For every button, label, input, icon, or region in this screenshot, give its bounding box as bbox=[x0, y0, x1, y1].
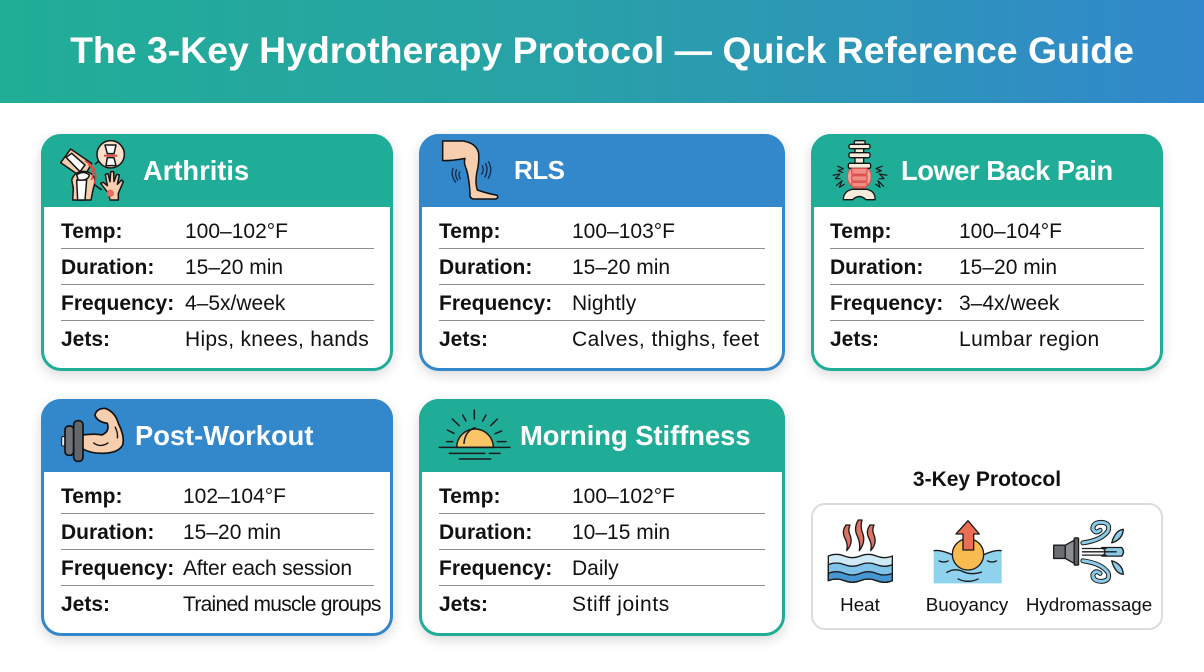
heading: Arthritis bbox=[143, 155, 249, 186]
field: Frequency bbox=[439, 557, 619, 580]
field: Temp bbox=[830, 220, 1062, 243]
panel: 3-Key Protocol bbox=[811, 503, 1163, 630]
field: Duration bbox=[61, 521, 281, 544]
field: Jets: Stiff joints bbox=[572, 593, 670, 616]
field: Jets: Jets: bbox=[830, 328, 879, 351]
heading: 3-Key Protocol: 3-Key Protocol bbox=[913, 468, 1061, 491]
field: Duration bbox=[439, 521, 670, 544]
field: Frequency: Frequency: bbox=[61, 557, 174, 580]
panel: Lower Back Pain bbox=[811, 134, 1163, 371]
field: Temp: Temp: bbox=[61, 485, 122, 508]
field: Frequency: Frequency: bbox=[830, 292, 943, 315]
field: Frequency bbox=[439, 292, 636, 315]
field: Temp bbox=[61, 485, 286, 508]
field: Duration bbox=[61, 256, 283, 279]
label: Heat: Heat bbox=[840, 594, 880, 615]
panel: Morning Stiffness bbox=[419, 399, 785, 636]
field: Jets bbox=[439, 328, 760, 351]
field: Duration bbox=[830, 256, 1057, 279]
field: Duration: Duration: bbox=[439, 521, 532, 544]
icon: knee and hand joints bbox=[60, 140, 126, 201]
field: Duration: 15–20 min bbox=[185, 256, 283, 279]
field: Temp bbox=[61, 220, 288, 243]
heading: Morning Stiffness bbox=[520, 420, 751, 451]
field: Jets: Jets: bbox=[439, 328, 488, 351]
field: Jets bbox=[830, 328, 1100, 351]
field: Jets bbox=[61, 593, 381, 616]
heading: Lower Back Pain bbox=[901, 155, 1113, 186]
field: Jets: Lumbar region bbox=[959, 328, 1100, 351]
icon: sun rising over water bbox=[438, 409, 511, 460]
icon: lumbar spine with pain marks bbox=[832, 140, 888, 200]
field: Jets: Jets: bbox=[61, 328, 110, 351]
field: Temp: Temp: bbox=[830, 220, 891, 243]
field: Duration: 10–15 min bbox=[572, 521, 670, 544]
field: Jets bbox=[61, 328, 369, 351]
field: Duration: Duration: bbox=[830, 256, 923, 279]
panel: Arthritis bbox=[41, 134, 393, 371]
field: Frequency bbox=[830, 292, 1060, 315]
title: The 3-Key Hydrotherapy Protocol — Quick Reference Guide bbox=[70, 29, 1134, 71]
field: Temp: Temp: bbox=[439, 485, 500, 508]
field: Frequency: After each session bbox=[183, 557, 352, 580]
field: Frequency: Frequency: bbox=[439, 292, 552, 315]
heading: Post-Workout bbox=[135, 420, 313, 451]
field: Jets: Calves, thighs, feet bbox=[572, 328, 760, 351]
field: Temp: 100–102°F bbox=[572, 485, 675, 508]
heading: RLS bbox=[514, 155, 564, 185]
icon: hydromassage jet bbox=[1053, 520, 1124, 584]
field: Temp: 100–103°F bbox=[572, 220, 675, 243]
field: Jets: Jets: bbox=[61, 593, 110, 616]
field: Temp: 100–104°F bbox=[959, 220, 1062, 243]
field: Temp: Temp: bbox=[61, 220, 122, 243]
panel header: Post-Workout bbox=[41, 399, 393, 472]
panel: RLS bbox=[419, 134, 785, 371]
panel: Post-Workout bbox=[41, 399, 393, 636]
field: Duration: 15–20 min bbox=[572, 256, 670, 279]
label: Buoyancy: Buoyancy bbox=[926, 594, 1008, 615]
field: Jets: Trained muscle groups bbox=[183, 593, 381, 616]
field: Frequency: 3–4x/week bbox=[959, 292, 1059, 315]
field: Temp: 102–104°F bbox=[183, 485, 286, 508]
field: Duration: Duration: bbox=[61, 521, 154, 544]
field: Jets: Hips, knees, hands bbox=[185, 328, 369, 351]
field: Temp bbox=[439, 485, 675, 508]
field: Frequency bbox=[61, 292, 286, 315]
field: Duration: 15–20 min bbox=[959, 256, 1057, 279]
icon: leg with motion lines bbox=[442, 140, 498, 200]
panel header: Lower Back Pain bbox=[811, 134, 1163, 207]
panel header: RLS bbox=[419, 134, 785, 207]
label: Hydromassage: Hydromassage bbox=[1026, 594, 1152, 615]
panel header: Arthritis bbox=[41, 134, 393, 207]
field: Jets bbox=[439, 593, 670, 616]
field: Temp: Temp: bbox=[439, 220, 500, 243]
field: Temp: 100–102°F bbox=[185, 220, 288, 243]
field: Temp bbox=[439, 220, 675, 243]
panel header: Morning Stiffness bbox=[419, 399, 785, 472]
field: Jets: Jets: bbox=[439, 593, 488, 616]
icon: buoyancy bbox=[934, 520, 1002, 584]
field: Frequency: Frequency: bbox=[439, 557, 552, 580]
field: Duration: 15–20 min bbox=[183, 521, 281, 544]
field: Frequency: Nightly bbox=[572, 292, 636, 315]
field: Frequency: 4–5x/week bbox=[185, 292, 285, 315]
icon: flexed arm with dumbbell bbox=[61, 408, 124, 462]
field: Duration bbox=[439, 256, 670, 279]
title banner bbox=[0, 0, 1204, 103]
icon: heat bbox=[828, 519, 893, 583]
field: Duration: Duration: bbox=[439, 256, 532, 279]
field: Frequency: Daily bbox=[572, 557, 619, 580]
field: Frequency: Frequency: bbox=[61, 292, 174, 315]
field: Duration: Duration: bbox=[61, 256, 154, 279]
field: Frequency bbox=[61, 557, 352, 580]
